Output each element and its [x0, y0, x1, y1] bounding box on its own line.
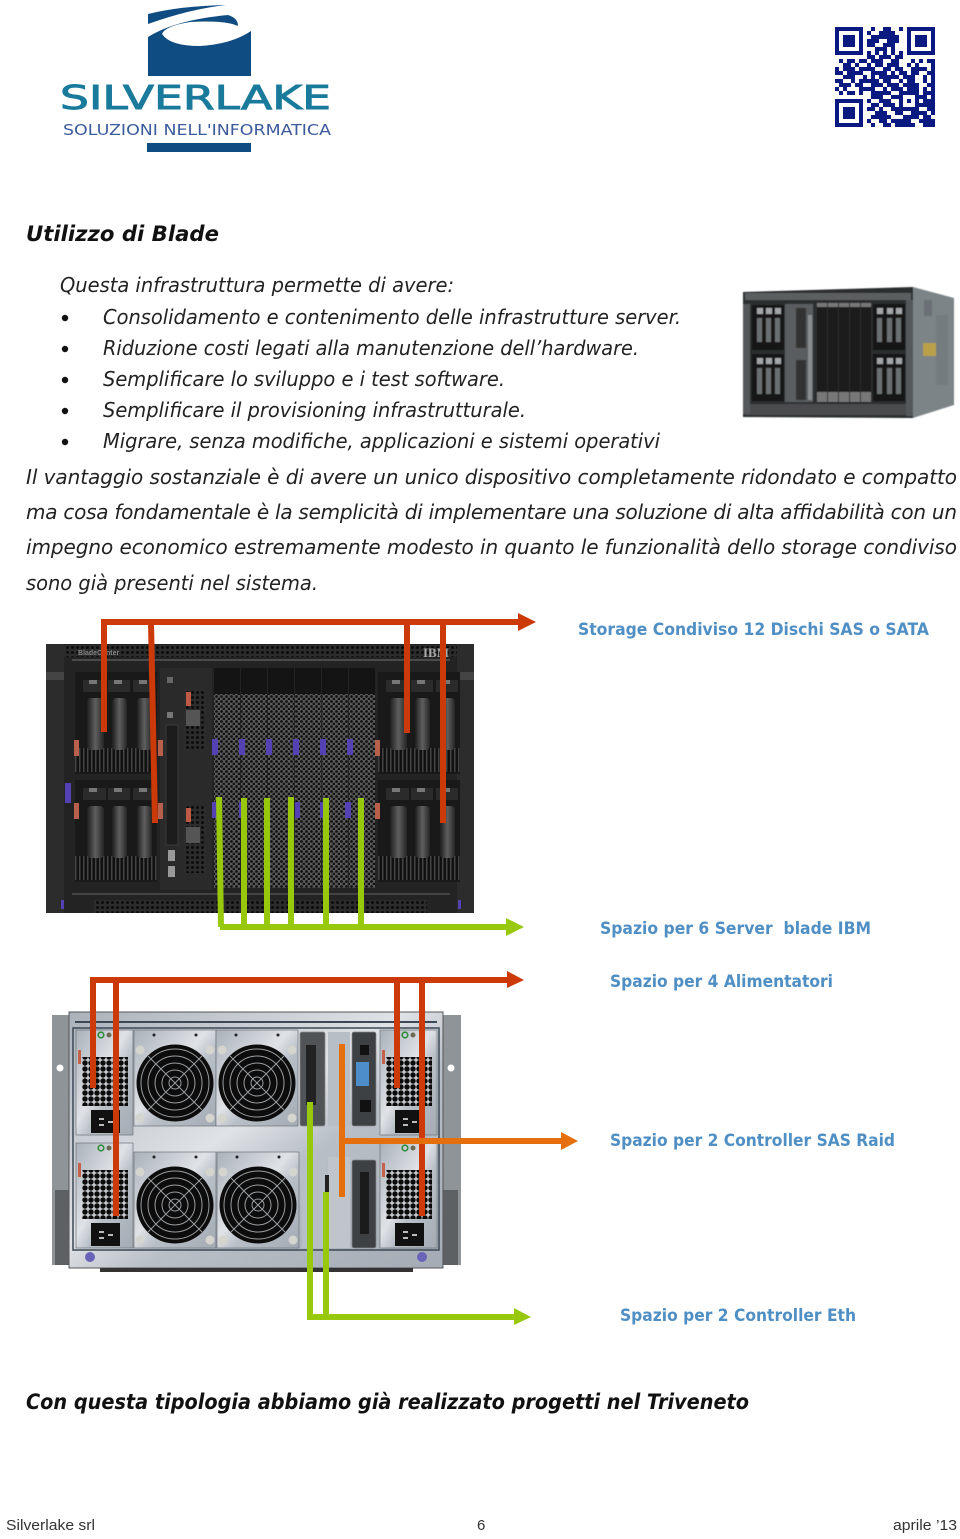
- text block: vantaggio paragraph: sono già presenti nel sistema.: [26, 571, 318, 595]
- footer: 6: [477, 1517, 485, 1534]
- text block: benefits list: Semplificare il provisioning infrastrutturale.: [103, 398, 526, 422]
- arrow: server blades green: [219, 797, 524, 936]
- image: chassis front view: BladeCenter: [78, 650, 120, 657]
- text block: benefits list: Questa infrastruttura permette di avere:: [60, 273, 454, 297]
- label: controller SAS: Spazio per 2 Controller SAS Raid: [610, 1131, 895, 1150]
- label: server blade: Spazio per 6 Server blade IBM: [600, 919, 871, 938]
- logo: Silverlake: [60, 5, 332, 152]
- arrow: alimentatori red (rear): [90, 971, 524, 1216]
- arrow: storage red (front): [101, 613, 536, 823]
- logo: Silverlake: SILVERLAKE: [60, 78, 331, 117]
- text block: benefits list: Semplificare lo sviluppo e i test software.: [103, 367, 505, 391]
- text block: vantaggio paragraph: [26, 465, 957, 595]
- text block: benefits list: Consolidamento e contenimento delle infrastrutture server.: [103, 305, 681, 329]
- footer: aprile ’13: [893, 1517, 957, 1534]
- text block: vantaggio paragraph: Il vantaggio sostanziale è di avere un unico dispositivo completamente ridondato e compatto: [26, 465, 957, 489]
- arrow: controller SAS orange: [342, 1044, 578, 1197]
- footer: [6, 1517, 957, 1534]
- text block: vantaggio paragraph: impegno economico estremamente modesto in quanto le funzionalità dello storage condiviso: [26, 535, 957, 559]
- QR code: [835, 29, 935, 125]
- text block: benefits list: Riduzione costi legati alla manutenzione dell’hardware.: [103, 336, 639, 360]
- logo: Silverlake: SOLUZIONI NELL'INFORMATICA: [63, 121, 332, 139]
- image: chassis front view: [46, 644, 474, 913]
- heading: Utilizzo di Blade: Utilizzo di Blade: [26, 222, 219, 246]
- image: chassis front view: IBM: [423, 645, 449, 660]
- label: storage: Storage Condiviso 12 Dischi SAS o SATA: [578, 620, 929, 639]
- arrow: controller Eth green: [307, 1102, 531, 1325]
- closing statement: Con questa tipologia abbiamo già realizzato progetti nel Triveneto: [26, 1390, 749, 1414]
- image: chassis rear view: [52, 1012, 461, 1272]
- label: alimentatori: Spazio per 4 Alimentatori: [610, 972, 833, 991]
- text block: vantaggio paragraph: ma cosa fondamentale è la semplicità di implementare una soluzione di alta affidabilità con un: [26, 500, 957, 524]
- label: controller Eth: Spazio per 2 Controller Eth: [620, 1306, 856, 1325]
- text block: benefits list: [60, 273, 681, 453]
- text block: benefits list: Migrare, senza modifiche, applicazioni e sistemi operativi: [103, 429, 660, 453]
- image: blade chassis photo: [743, 287, 954, 418]
- footer: Silverlake srl: [6, 1517, 95, 1534]
